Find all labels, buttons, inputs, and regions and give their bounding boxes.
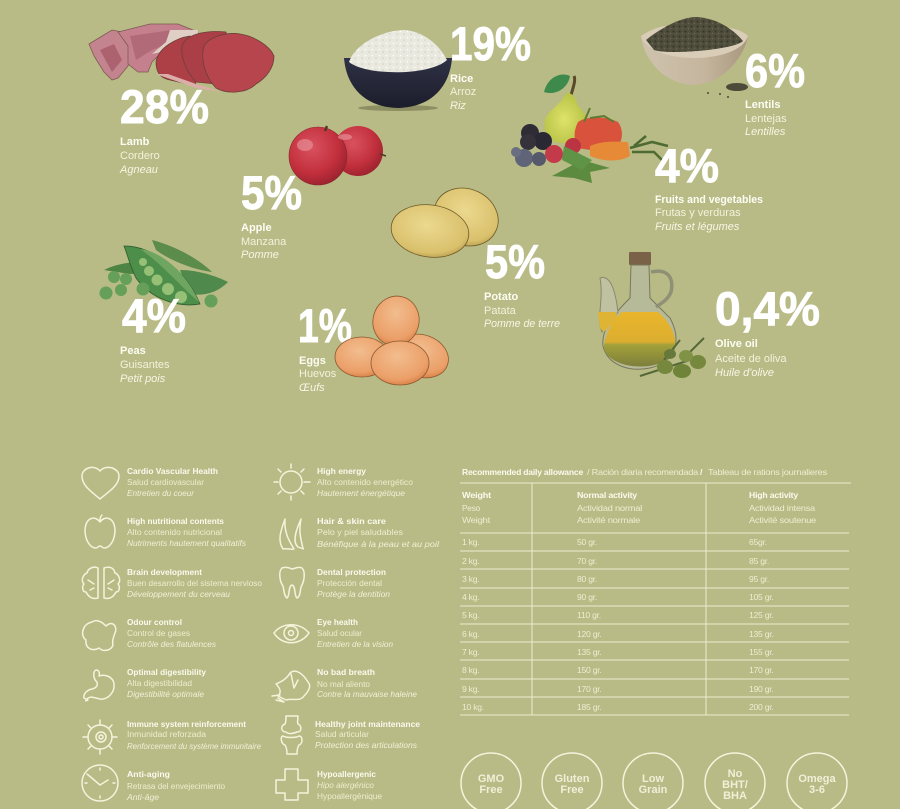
benefit: dental protection: Dental protection <box>317 568 386 577</box>
text: olive oil: Huile d'olive <box>715 367 774 379</box>
badge: no BHT/BHA: BHA <box>723 790 747 802</box>
benefit: eye health: Entretien de la vision <box>317 640 394 649</box>
table rows: 135 gr. <box>577 647 602 657</box>
benefit: optimal digestibility <box>127 668 207 699</box>
benefit: dental protection: Protège la dentition <box>317 590 391 599</box>
benefit: eye health <box>317 618 394 649</box>
table rows: 150 gr. <box>577 665 602 675</box>
badge: gluten free: Gluten <box>555 773 590 785</box>
panel: daily allowance table <box>460 467 851 715</box>
benefit: cardio vascular health: Cardio Vascular Health <box>127 467 218 476</box>
table rows: 135 gr. <box>749 629 774 639</box>
table rows: 105 gr. <box>749 592 774 602</box>
table rows: 95 gr. <box>749 574 769 584</box>
table header: Actividad intensa <box>749 503 815 513</box>
table rows: 90 gr. <box>577 592 597 602</box>
table header: Activité normale <box>577 515 641 525</box>
badge: GMO free <box>461 753 521 809</box>
table rows <box>462 537 774 712</box>
text: lamb: Cordero <box>120 150 160 162</box>
table rows: 170 gr. <box>577 684 602 694</box>
table title: Recommended daily allowance <box>462 467 583 477</box>
text: lentils: Lentilles <box>745 126 786 138</box>
table rows: 85 gr. <box>749 556 769 566</box>
benefit: anti-aging: Retrasa del envejecimiento <box>127 782 226 791</box>
benefit: hypoallergenic: Hipo alergénico <box>317 781 375 790</box>
text: eggs percentage: Eggs <box>299 355 326 367</box>
text: lamb <box>119 80 209 176</box>
illustration: peas <box>100 240 228 308</box>
text: olive oil: Olive oil <box>715 338 758 350</box>
text: lamb: 28% <box>120 80 209 133</box>
table title: Tableau de rations journalieres <box>708 467 827 477</box>
benefit: immune system reinforcement: Renforcement du système immunitaire <box>127 742 262 751</box>
table rows: 10 kg. <box>462 702 484 712</box>
text: apple: 5% <box>241 166 302 219</box>
text: peas: Peas <box>120 345 146 357</box>
benefit: anti-aging <box>126 770 226 802</box>
table header: Peso <box>462 503 480 513</box>
illustration: lamb cuts <box>89 24 274 92</box>
benefit: anti-aging: Anti-âge <box>126 793 160 802</box>
benefit: healthy joint maintenance: Salud articular <box>315 730 369 739</box>
badge: low grain <box>623 753 683 809</box>
benefit: cardio vascular health: Entretien du coeur <box>127 489 194 498</box>
badge: no BHT/BHA: BHT/ <box>722 779 748 791</box>
table rows: 200 gr. <box>749 702 774 712</box>
benefit: immune system reinforcement: Immune system reinforcement <box>127 720 246 729</box>
badge: low grain: Low <box>642 773 664 785</box>
text: fruits and vegetables: Fruits and vegetables <box>655 194 763 206</box>
benefit: healthy joint maintenance: Protection des articulations <box>315 741 417 750</box>
benefit: brain development <box>127 568 263 599</box>
table rows: 110 gr. <box>577 610 601 620</box>
table rows: 70 gr. <box>577 556 597 566</box>
icon: cross <box>276 769 308 800</box>
table title: / Ración diaria recomendada <box>587 467 699 477</box>
benefit: anti-aging: Anti-aging <box>127 770 170 779</box>
benefit: hair and skin care <box>317 517 439 549</box>
text: peas: Guisantes <box>120 359 170 371</box>
table rows: 5 kg. <box>462 610 479 620</box>
benefit: healthy joint maintenance: Healthy joint maintenance <box>315 720 421 729</box>
icon: joint <box>281 716 302 754</box>
table header: Weight <box>462 490 491 500</box>
table rows: 155 gr. <box>749 647 774 657</box>
icon: brain <box>82 567 120 599</box>
text: potato: 5% <box>485 235 545 288</box>
benefit: immune system reinforcement: Inmunidad reforzada <box>127 730 207 739</box>
badge: gluten free <box>542 753 602 809</box>
table rows: 3 kg. <box>462 574 479 584</box>
table header: Normal activity <box>577 490 637 500</box>
panel: feature badges <box>461 753 847 809</box>
text: lentils: Lentils <box>745 99 780 111</box>
benefit: brain development: Brain development <box>127 568 202 577</box>
table rows: 50 gr. <box>577 537 597 547</box>
text: fruits and vegetables <box>655 139 763 233</box>
table rows: 4 kg. <box>462 592 479 602</box>
table rows: 9 kg. <box>462 684 479 694</box>
icon: immune system <box>83 720 117 754</box>
text: rice <box>450 17 531 112</box>
text: fruits and vegetables: Fruits et légumes <box>655 221 740 233</box>
table grid <box>460 483 851 715</box>
benefit: high nutritional contents: Alto contenido nutricional <box>127 528 222 537</box>
benefit: eye health: Eye health <box>317 618 358 627</box>
table title: / <box>700 467 703 477</box>
table rows: 170 gr. <box>749 665 774 675</box>
text: potato <box>484 235 560 330</box>
text: fruits and vegetables: 4% <box>655 139 719 192</box>
text: lentils: 6% <box>745 44 805 97</box>
panel: health benefits <box>82 464 439 802</box>
icon: dog breath <box>272 671 310 702</box>
benefit: eye health: Salud ocular <box>317 629 362 638</box>
benefit: odour control: Odour control <box>127 618 182 627</box>
illustration: olive oil jug <box>598 252 706 378</box>
badge: gluten free: Free <box>560 784 584 796</box>
text: apple <box>241 166 302 261</box>
benefit: optimal digestibility: Digestibilité optimale <box>127 690 205 699</box>
icon: clock <box>82 765 118 801</box>
icon: eye <box>274 625 309 643</box>
benefit: high energy: High energy <box>317 467 367 476</box>
table rows: 120 gr. <box>577 629 602 639</box>
text: peas: 4% <box>122 289 186 342</box>
icon: tooth <box>280 567 304 598</box>
text: fruits and vegetables: Frutas y verduras <box>655 207 741 219</box>
table rows: 190 gr. <box>749 684 774 694</box>
benefit: optimal digestibility: Optimal digestibility <box>127 668 207 677</box>
text: lentils <box>745 44 805 138</box>
text: eggs percentage: Œufs <box>299 382 325 394</box>
text: rice: Riz <box>450 100 466 112</box>
benefit: high energy: Alto contenido energético <box>317 478 414 487</box>
benefit: brain development: Buen desarrollo del sistema nervioso <box>127 579 263 588</box>
badge: omega 3-6 <box>787 753 847 809</box>
benefit: optimal digestibility: Alta digestibilidad <box>127 679 192 688</box>
benefit: no bad breath: Contre la mauvaise haleine <box>317 690 418 699</box>
text: potato: Patata <box>484 305 517 317</box>
benefit: hypoallergenic: Hypoallergénique <box>317 792 383 801</box>
benefit: dental protection <box>317 568 391 599</box>
text: olive oil: Aceite de oliva <box>715 353 787 365</box>
table title <box>462 467 827 477</box>
benefit: hypoallergenic: Hypoallergenic <box>317 770 377 779</box>
text: apple: Manzana <box>241 236 287 248</box>
benefit: no bad breath: No bad breath <box>317 668 375 677</box>
text: apple: Pomme <box>241 249 279 261</box>
icon: sun <box>274 464 310 500</box>
icon: apple <box>85 515 115 548</box>
benefit: high energy: Hautement énergétique <box>317 489 406 498</box>
text: peas: Petit pois <box>120 373 166 385</box>
benefit: high energy <box>317 467 414 498</box>
illustration: apples <box>289 126 386 185</box>
text: eggs percentage: Huevos <box>299 368 337 380</box>
table header: High activity <box>749 490 798 500</box>
badge: no BHT/BHA: No <box>728 768 743 780</box>
benefit: high nutritional contents <box>127 517 246 548</box>
table header: Weight <box>462 515 491 525</box>
benefit: immune system reinforcement <box>127 720 262 751</box>
table header: Actividad normal <box>577 503 642 513</box>
illustration: lentil bowl <box>641 17 748 98</box>
illustration: rice bowl <box>344 30 452 111</box>
benefit: no bad breath <box>317 668 418 699</box>
table rows: 6 kg. <box>462 629 479 639</box>
text: rice: 19% <box>450 17 531 70</box>
benefit: hair and skin care: Pelo y piel saludables <box>317 528 403 537</box>
table rows: 125 gr. <box>749 610 774 620</box>
table header <box>462 490 817 525</box>
badge: no BHT/BHA <box>705 753 765 809</box>
benefit: odour control: Control de gases <box>127 629 190 638</box>
text: lentils: Lentejas <box>745 113 787 125</box>
text: rice: Arroz <box>450 86 476 98</box>
table rows: 7 kg. <box>462 647 479 657</box>
illustration: eggs <box>335 291 455 385</box>
text: apple: Apple <box>241 222 272 234</box>
text: eggs percentage <box>298 299 352 394</box>
text: eggs percentage: 1% <box>298 299 352 352</box>
benefit: no bad breath: No mal aliento <box>317 680 371 689</box>
table rows: 65gr. <box>749 537 767 547</box>
text: olive oil <box>715 282 820 379</box>
benefit: hair and skin care: Bénéfique à la peau et au poil <box>317 540 439 549</box>
badge: GMO free: Free <box>479 784 503 796</box>
icon: odour cloud <box>83 621 116 650</box>
table rows: 80 gr. <box>577 574 597 584</box>
benefit: high nutritional contents: Nutriments hautement qualitatifs <box>127 539 246 548</box>
text: potato: Potato <box>484 291 518 303</box>
text: lamb: Agneau <box>119 164 158 176</box>
badge: low grain: Grain <box>639 784 668 796</box>
text: peas <box>120 289 186 385</box>
illustration: potatoes <box>388 178 508 262</box>
icon: stomach <box>84 670 114 701</box>
table rows: 2 kg. <box>462 556 479 566</box>
icon: hair <box>280 519 303 549</box>
text: potato: Pomme de terre <box>484 318 560 330</box>
benefit: high nutritional contents: High nutritional contents <box>127 517 225 526</box>
benefit: hair and skin care: Hair & skin care <box>317 517 387 526</box>
text: rice: Rice <box>450 73 473 85</box>
text: olive oil: 0,4% <box>715 282 820 335</box>
benefit: cardio vascular health: Salud cardiovascular <box>127 478 204 487</box>
table header: Activité soutenue <box>749 515 817 525</box>
benefit: hypoallergenic <box>317 770 383 801</box>
benefit: cardio vascular health <box>127 467 218 498</box>
benefit: odour control: Contrôle des flatulences <box>127 640 216 649</box>
benefit: odour control <box>127 618 216 649</box>
illustration: fruits and vegetables <box>511 75 668 183</box>
badge: omega 3-6: Omega <box>798 773 837 785</box>
benefit: healthy joint maintenance <box>315 720 421 750</box>
benefit: brain development: Développement du cerveau <box>127 590 231 599</box>
icon: heart <box>82 467 119 499</box>
benefit: dental protection: Protección dental <box>317 579 382 588</box>
text: lamb: Lamb <box>120 136 150 148</box>
table rows: 8 kg. <box>462 665 479 675</box>
badge: GMO free: GMO <box>478 773 505 785</box>
badge: omega 3-6: 3-6 <box>809 784 825 796</box>
table rows: 1 kg. <box>462 537 479 547</box>
table rows: 185 gr. <box>577 702 602 712</box>
